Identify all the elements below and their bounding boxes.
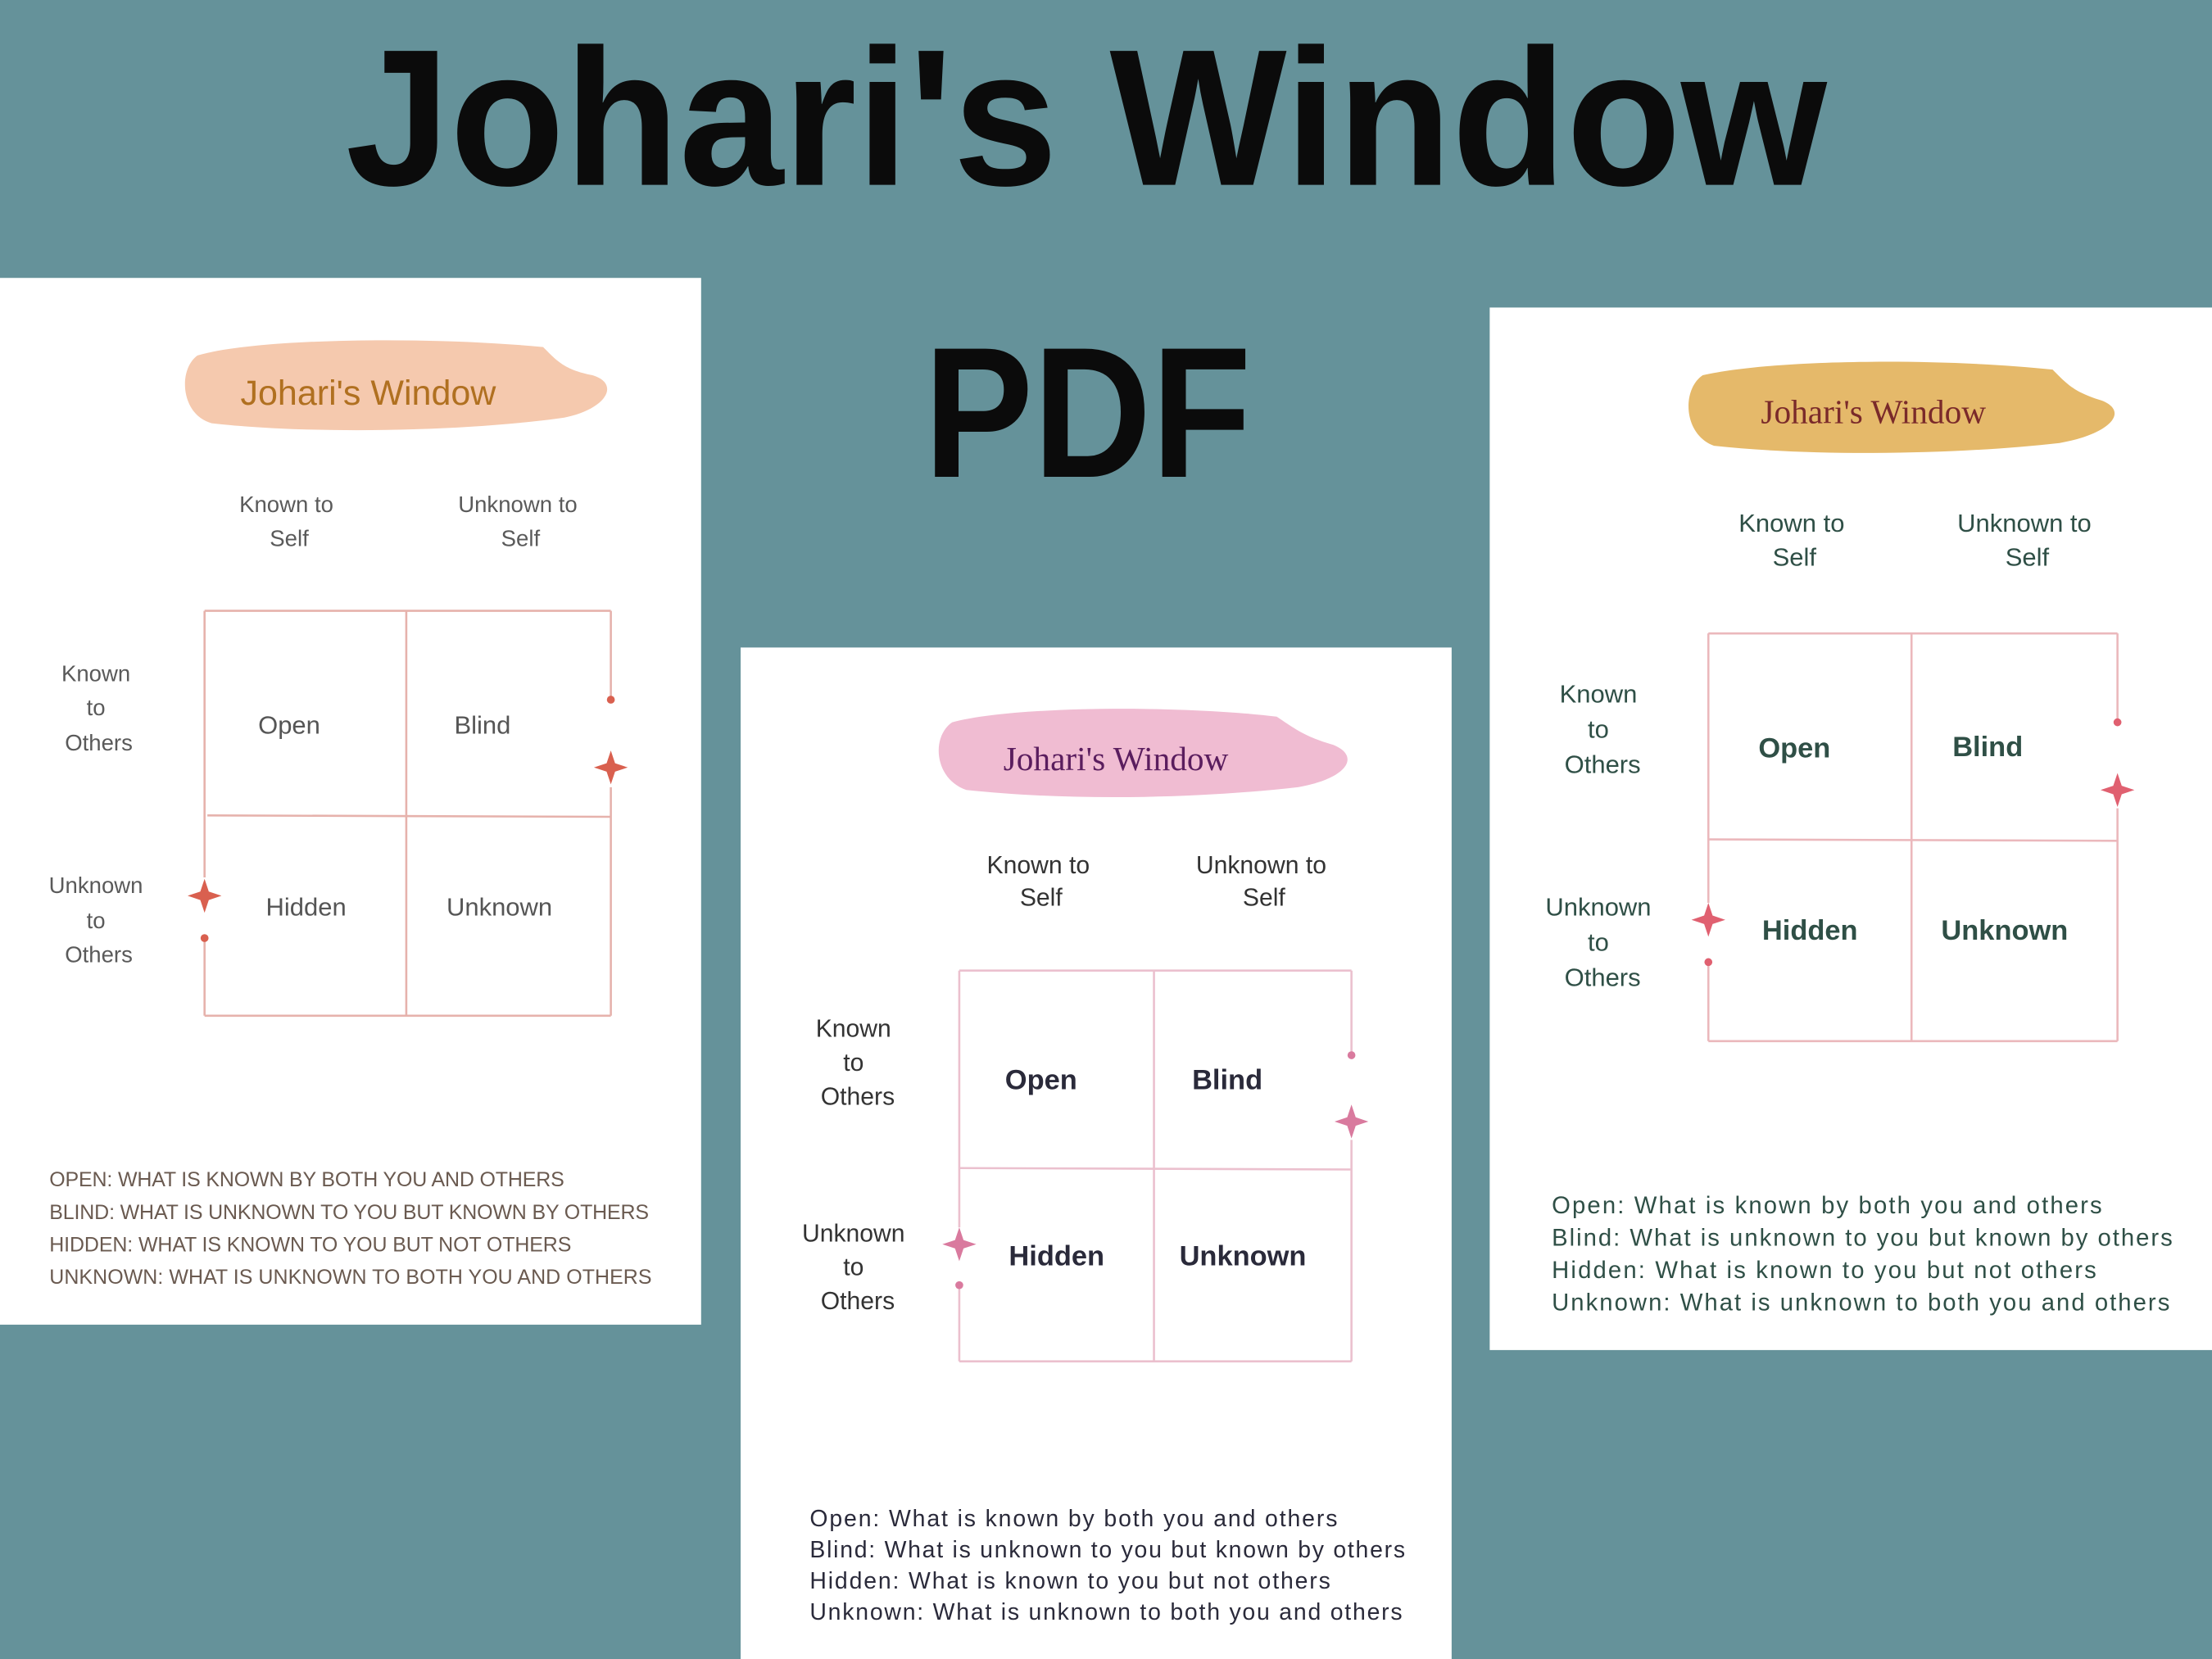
row labels: Unknown	[49, 873, 143, 898]
column headers: Known to	[1738, 509, 1844, 537]
cell labels	[258, 710, 552, 922]
row labels: Others	[821, 1083, 895, 1110]
column headers: Self	[1020, 884, 1063, 911]
icon: stars and dots	[942, 1051, 1368, 1290]
row labels: Others	[65, 941, 133, 967]
cell labels: Unknown	[1941, 915, 2068, 946]
row labels: Others	[821, 1288, 895, 1315]
panel: right worksheet (gold)	[1489, 307, 2212, 1350]
cell labels: Blind	[1192, 1064, 1262, 1095]
title	[346, 10, 1828, 517]
column headers: Known to	[239, 492, 333, 517]
row labels: to	[1588, 715, 1609, 744]
column headers: Unknown to	[1196, 852, 1326, 879]
title: Johari's Window	[346, 10, 1828, 227]
row labels: Known	[1560, 680, 1637, 709]
definitions: UNKNOWN: WHAT IS UNKNOWN TO BOTH YOU AND OTHERS	[49, 1266, 652, 1289]
cell labels: Open	[1758, 733, 1830, 764]
column headers	[1738, 509, 2092, 571]
cell labels: Unknown	[446, 893, 552, 922]
definitions: Hidden: What is known to you but not others	[809, 1568, 1330, 1594]
row labels: to	[843, 1049, 863, 1077]
header blob	[939, 709, 1348, 797]
row labels: to	[87, 695, 106, 720]
panel: middle worksheet (pink)	[741, 647, 1452, 1659]
row labels: Known	[816, 1016, 891, 1043]
definitions: Unknown: What is unknown to both you and others	[1552, 1290, 2169, 1317]
cell labels	[1005, 1064, 1306, 1272]
column headers: Self	[270, 525, 309, 551]
definitions: Hidden: What is known to you but not others	[1552, 1258, 2096, 1284]
row labels: Known	[61, 661, 130, 687]
definitions	[49, 1168, 652, 1289]
grid	[205, 611, 611, 1016]
definitions: BLIND: WHAT IS UNKNOWN TO YOU BUT KNOWN BY OTHERS	[49, 1201, 649, 1224]
row labels: Others	[1565, 963, 1641, 992]
row labels: Others	[65, 730, 133, 755]
cell labels: Open	[258, 710, 320, 739]
column headers: Self	[1773, 542, 1816, 571]
row labels	[1545, 680, 1652, 992]
definitions: Blind: What is unknown to you but known by others	[1552, 1225, 2173, 1251]
definitions: Unknown: What is unknown to both you and others	[809, 1599, 1403, 1625]
column headers: Self	[2006, 542, 2050, 571]
grid	[959, 971, 1352, 1362]
header blob	[185, 340, 607, 430]
column headers	[239, 492, 578, 551]
column headers: Self	[1243, 884, 1285, 911]
definitions	[1552, 1193, 2173, 1317]
definitions: Open: What is known by both you and others	[1552, 1193, 2102, 1219]
definitions: OPEN: WHAT IS KNOWN BY BOTH YOU AND OTHERS	[49, 1168, 564, 1191]
definitions: HIDDEN: WHAT IS KNOWN TO YOU BUT NOT OTHERS	[49, 1233, 571, 1256]
cell labels: Blind	[1952, 732, 2023, 763]
definitions	[809, 1506, 1405, 1625]
panel: left worksheet (peach)	[0, 278, 701, 1325]
row labels: to	[1588, 928, 1609, 957]
icon: stars and dots	[1692, 718, 2134, 966]
grid	[1708, 633, 2118, 1041]
column headers	[987, 852, 1326, 911]
row labels: to	[843, 1254, 863, 1281]
cell labels	[1758, 732, 2068, 946]
column headers: Unknown to	[458, 492, 578, 517]
row labels: Unknown	[802, 1220, 905, 1247]
definitions: Open: What is known by both you and others	[809, 1506, 1337, 1532]
row labels	[802, 1016, 905, 1315]
cell labels: Open	[1005, 1064, 1077, 1095]
cell labels: Hidden	[1762, 915, 1858, 946]
header blob: Johari's Window	[1004, 740, 1229, 777]
cell labels: Hidden	[266, 893, 347, 922]
header blob: Johari's Window	[240, 374, 496, 413]
column headers: Unknown to	[1957, 509, 2092, 537]
title: PDF	[924, 309, 1251, 517]
icon: stars and dots	[188, 696, 628, 942]
row labels	[49, 661, 143, 967]
cell labels: Unknown	[1180, 1241, 1306, 1272]
header blob	[1688, 362, 2115, 453]
row labels: Unknown	[1545, 893, 1652, 922]
row labels: Others	[1565, 750, 1641, 779]
definitions: Blind: What is unknown to you but known by others	[809, 1537, 1405, 1563]
cell labels: Blind	[454, 710, 510, 739]
cell labels: Hidden	[1009, 1241, 1104, 1272]
header blob: Johari's Window	[1761, 393, 1986, 431]
column headers: Known to	[987, 852, 1090, 879]
row labels: to	[87, 908, 106, 933]
column headers: Self	[501, 525, 540, 551]
